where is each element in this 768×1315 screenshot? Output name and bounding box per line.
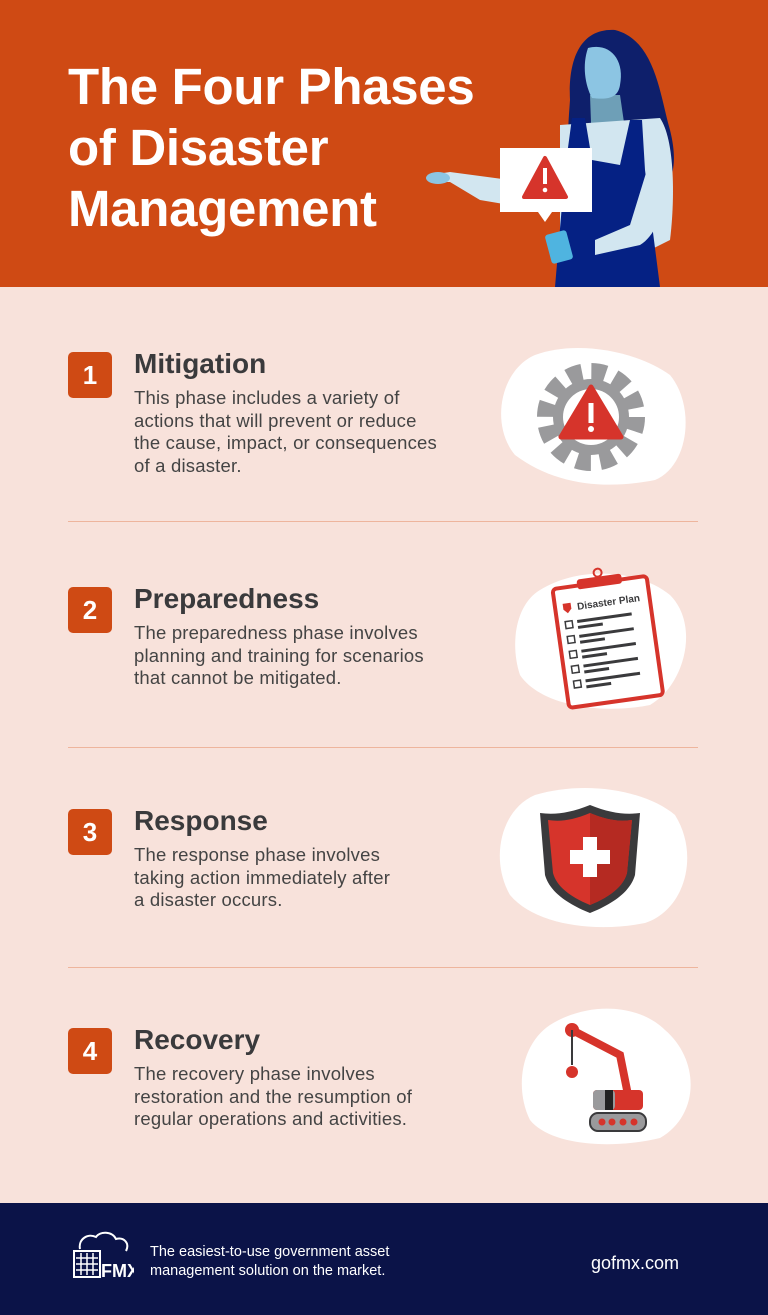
tagline: [150, 1244, 390, 1279]
section 1: Mitigation: of a disaster.: [134, 454, 242, 476]
section 2: Preparedness: that cannot be mitigated.: [134, 667, 342, 688]
section 1: Mitigation: the cause, impact, or consequences: [134, 432, 437, 453]
section 1: Mitigation: This phase includes a variety of: [134, 387, 400, 408]
section 4: Recovery: Recovery: [134, 1024, 260, 1055]
section 2: Preparedness: [68, 583, 424, 688]
title: [68, 58, 474, 237]
title: The Four Phases: [68, 58, 474, 115]
icon: shield with cross: [500, 788, 688, 928]
section 4: Recovery: [68, 1024, 412, 1129]
section 1: Mitigation: Mitigation: [134, 348, 266, 379]
illustration: woman with warning sign: [426, 30, 674, 287]
section 3: Response: taking action immediately after: [134, 866, 390, 888]
section 2: Preparedness: Preparedness: [134, 583, 319, 614]
section 4: Recovery: 4: [83, 1036, 97, 1066]
section 3: Response: [68, 805, 390, 910]
tagline: management solution on the market.: [150, 1263, 385, 1279]
website: gofmx.com: [591, 1253, 679, 1273]
section 2: Preparedness: The preparedness phase involves: [134, 622, 418, 643]
icon: clipboard disaster plan: Disaster Plan: [576, 593, 641, 613]
section 2: Preparedness: planning and training for scenarios: [134, 644, 424, 666]
icon: crane: [522, 1008, 691, 1144]
section 1: Mitigation: [68, 348, 437, 476]
section 1: Mitigation: 1: [83, 360, 97, 390]
section 4: Recovery: regular operations and activities.: [134, 1108, 407, 1129]
section 2: Preparedness: 2: [83, 595, 97, 625]
logo: FMX: [73, 1232, 134, 1279]
section 3: Response: 3: [83, 817, 97, 847]
icon: gear with warning: [501, 348, 686, 485]
footer: [0, 1203, 768, 1315]
section 3: Response: The response phase involves: [134, 844, 380, 865]
title: of Disaster: [68, 119, 328, 176]
section 1: Mitigation: actions that will prevent or reduce: [134, 410, 417, 430]
section 4: Recovery: restoration and the resumption of: [134, 1086, 412, 1106]
section 3: Response: Response: [134, 805, 268, 836]
title: Management: [68, 180, 377, 237]
header: [0, 0, 768, 287]
section 3: Response: a disaster occurs.: [134, 889, 283, 910]
section 4: Recovery: The recovery phase involves: [134, 1063, 375, 1084]
icon: clipboard disaster plan: [515, 568, 686, 710]
tagline: The easiest-to-use government asset: [150, 1244, 389, 1260]
